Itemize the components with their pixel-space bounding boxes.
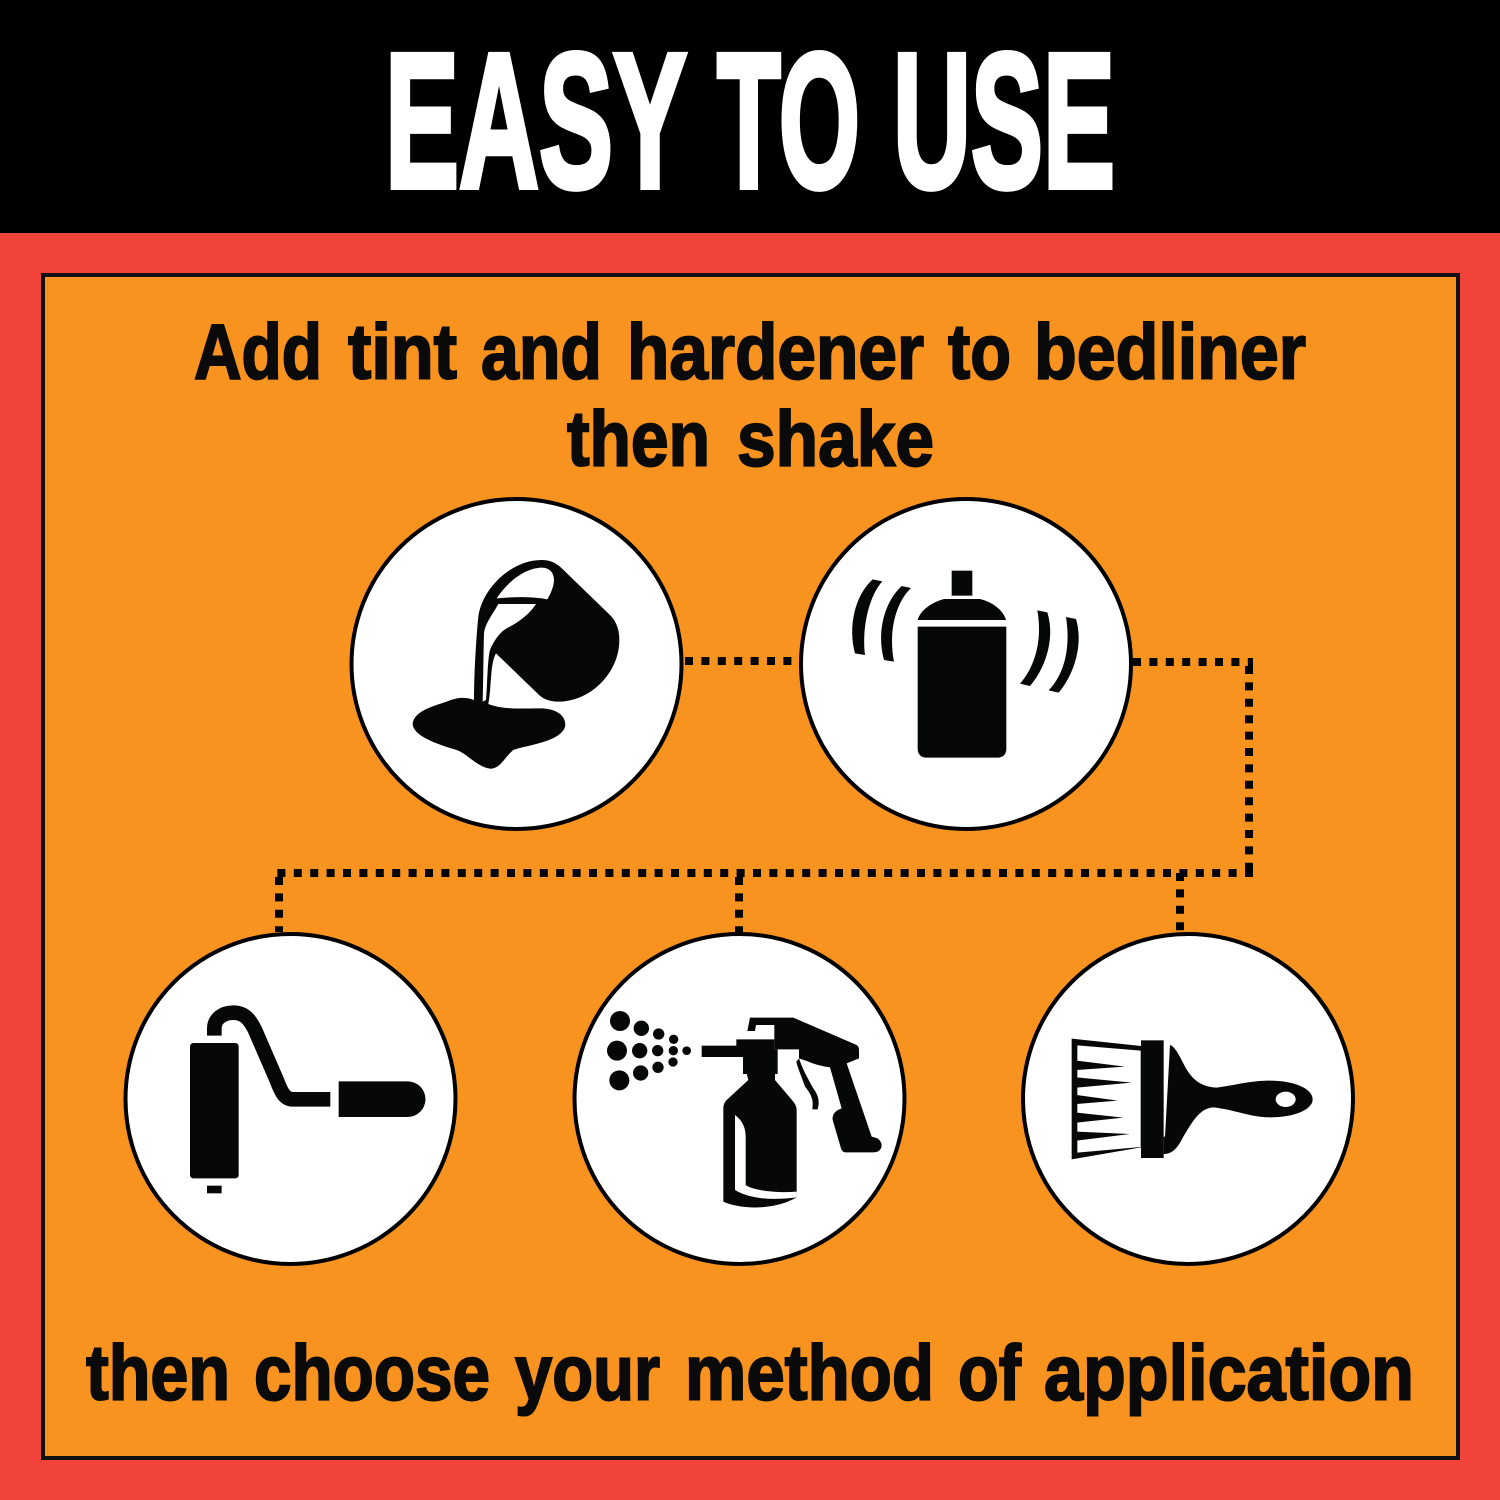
heading: add tint and hardener: Add bbox=[194, 308, 322, 396]
icon: paint brush bbox=[1023, 934, 1353, 1264]
title banner bbox=[0, 0, 1500, 233]
heading: add tint and hardener: tint bbox=[348, 308, 457, 396]
heading: choose method of application: choose bbox=[254, 1328, 490, 1416]
heading: add tint and hardener: to bbox=[948, 308, 1011, 396]
heading: choose method of application: application bbox=[1044, 1328, 1414, 1416]
icon: pouring cup bbox=[352, 499, 682, 829]
heading: add tint and hardener: shake bbox=[737, 394, 934, 482]
heading: choose method of application: then bbox=[86, 1328, 230, 1416]
icon: paint roller bbox=[126, 934, 456, 1264]
heading: add tint and hardener: then bbox=[567, 394, 710, 482]
heading: add tint and hardener: bedliner bbox=[1034, 308, 1306, 396]
icon: shaking spray can bbox=[801, 499, 1131, 829]
title: EASY TO USE: EASY bbox=[385, 13, 685, 228]
title: EASY TO USE: TO bbox=[717, 13, 860, 228]
heading: add tint and hardener: hardener bbox=[627, 308, 924, 396]
icon: spray gun bbox=[574, 934, 904, 1264]
heading: add tint and hardener bbox=[194, 308, 1306, 482]
heading: choose method of application: of bbox=[958, 1328, 1022, 1416]
heading: choose method of application: method bbox=[685, 1328, 934, 1416]
dotted connectors bbox=[274, 661, 1253, 932]
heading: add tint and hardener: and bbox=[481, 308, 602, 396]
title: EASY TO USE: USE bbox=[893, 13, 1115, 228]
orange panel bbox=[43, 275, 1458, 1458]
heading: choose method of application: your bbox=[515, 1328, 660, 1416]
